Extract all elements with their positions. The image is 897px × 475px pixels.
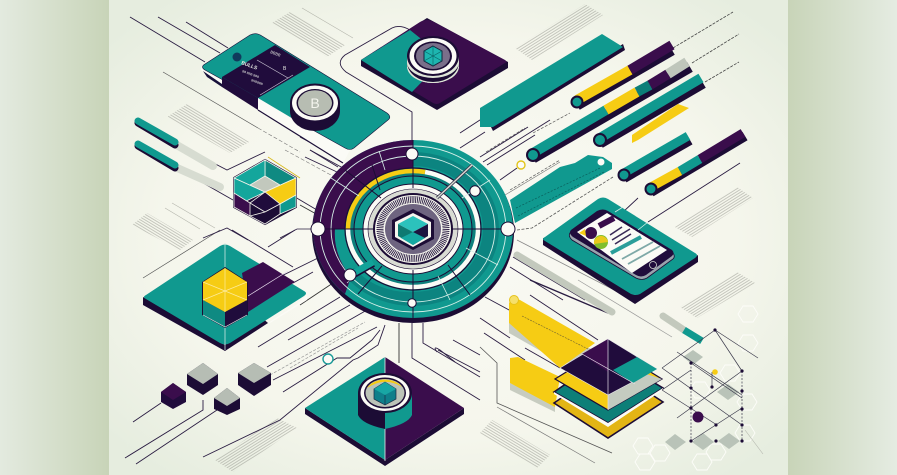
chart: bar 1 teal yellow purple — [572, 45, 672, 108]
cube A — [187, 363, 218, 395]
connector lines — [125, 12, 740, 464]
icon: faceted hexagon cube — [234, 157, 300, 224]
panel: top-left card with coin — [201, 34, 390, 163]
icon: ring with cube — [358, 373, 412, 429]
icon: ringed hexagon coin — [407, 36, 459, 83]
grid lines — [662, 330, 758, 441]
card label text: B — [283, 66, 287, 72]
callout: yellow ring node — [517, 161, 525, 169]
icon: smartphone — [569, 210, 674, 280]
panel: central radial hub — [311, 140, 515, 323]
nodes — [689, 328, 744, 443]
card label text: BULLS — [240, 60, 259, 72]
hub: thin rings — [320, 146, 506, 312]
cube D — [161, 383, 186, 409]
hexagon outlines — [633, 306, 758, 470]
chart: isometric network grid with hexagons — [633, 306, 763, 470]
card base — [201, 35, 390, 163]
card label text: BBBB — [270, 49, 282, 58]
icon: coin — [290, 84, 340, 131]
card label text: BRBBBB — [251, 78, 263, 86]
hub: needle — [437, 165, 472, 198]
cube B — [238, 363, 271, 396]
icon: central hexagon — [392, 209, 434, 250]
hub: yellow and white arc — [348, 171, 478, 287]
icon: yellow cube — [202, 267, 248, 328]
panel: teal notched tag — [510, 155, 612, 223]
panel: bottom-left tile with yellow cube — [143, 243, 307, 351]
icon: yellow arrow tag — [632, 104, 689, 143]
panel: large teal banner — [480, 34, 625, 131]
icon: small cube group — [161, 363, 271, 415]
chart: bar 4 teal — [618, 136, 690, 180]
phone screen content — [579, 218, 660, 264]
panel: phone tile — [543, 198, 698, 304]
icon: teal ring node — [323, 354, 333, 364]
chart: bar 2 multi-segment — [527, 62, 690, 161]
icon: small badge — [232, 52, 242, 62]
hub: teal slider — [352, 263, 373, 275]
hub: purple sector — [313, 140, 413, 294]
text blocks: hatched placeholder copy — [132, 4, 755, 472]
card label text — [240, 49, 287, 86]
panel: gray pill bars — [517, 255, 702, 341]
cube C — [214, 388, 240, 415]
chart: bar 3 teal — [594, 78, 703, 146]
card label text: BB BBB BBB — [242, 69, 260, 79]
panel: left teal progress bars — [138, 121, 220, 187]
panel: bottom tile with ring — [305, 357, 464, 466]
chart: bar 5 yellow teal purple — [646, 133, 745, 194]
hub: teal dark band — [345, 152, 499, 306]
panel: layered stack — [554, 339, 663, 438]
hub: nodes — [311, 148, 515, 307]
icon: coin: B — [310, 95, 320, 111]
hub: spokes — [318, 140, 508, 320]
panel: top tile with coin — [361, 18, 508, 110]
gray rhombi — [665, 350, 740, 450]
panel: yellow ribbons — [509, 296, 595, 412]
